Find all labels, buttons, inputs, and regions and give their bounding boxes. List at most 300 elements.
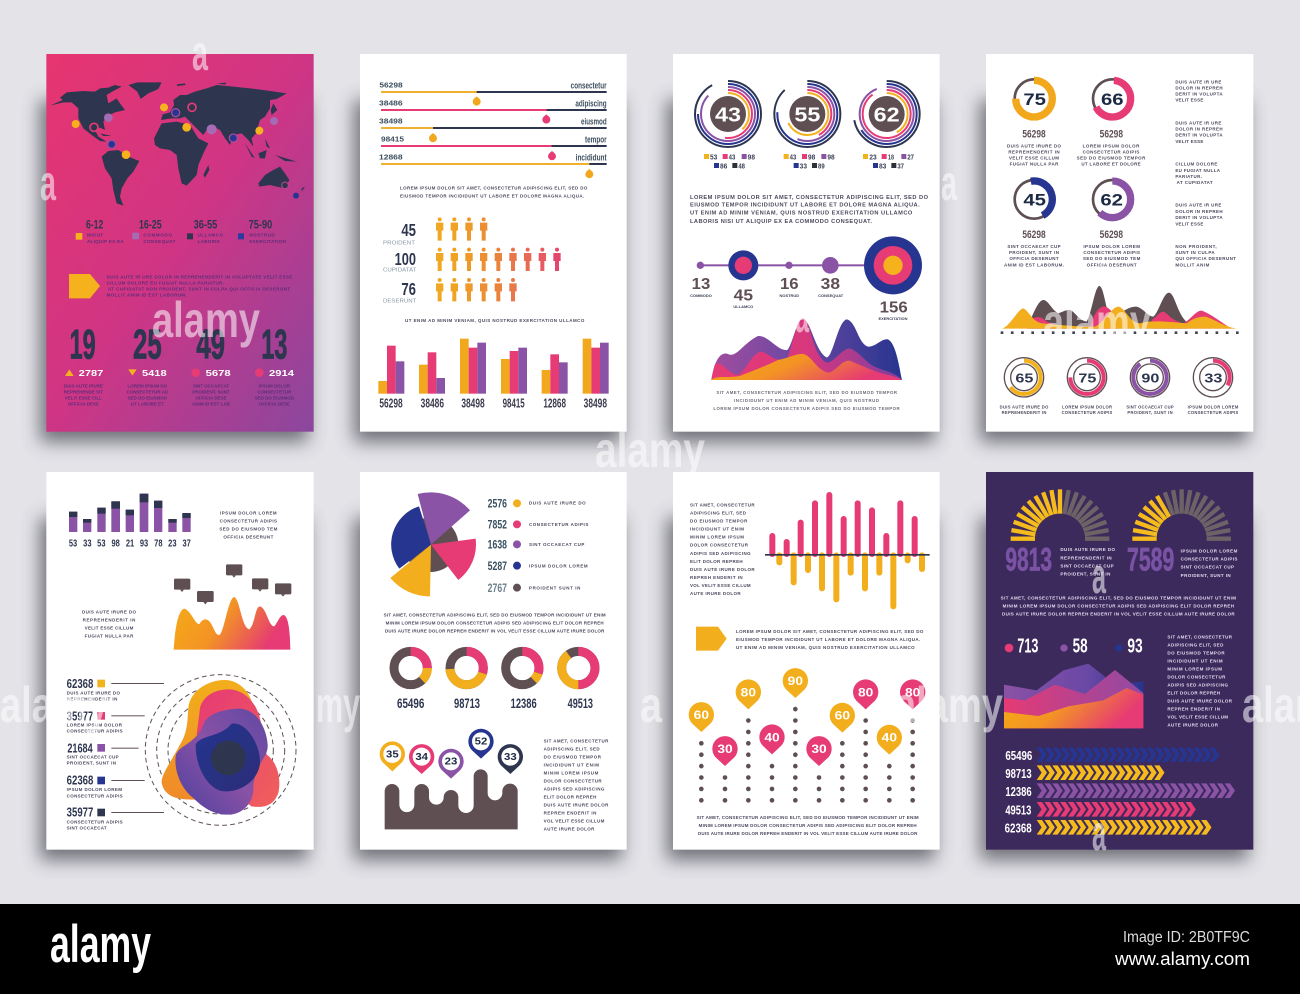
gauge labels xyxy=(1005,542,1238,578)
donut 45 xyxy=(1013,178,1055,221)
map legend: NOSTRUD xyxy=(249,232,275,237)
small gauge 90: 90 xyxy=(1141,370,1159,385)
ring legends: 43 xyxy=(790,152,796,161)
bubble timeline: 38 xyxy=(821,276,841,293)
text block: LOREM IPSUM DOLOR SIT AMET, CONSECTETUR ADIPISCING ELIT, SED DO xyxy=(736,629,924,634)
text block: VOL VELIT ESSE CILLUM xyxy=(544,818,605,823)
arrow tag xyxy=(696,627,727,651)
donut captions: ANIM ID EST LABORUM. xyxy=(1004,262,1064,267)
slider rows: 98415 xyxy=(381,134,404,143)
donut captions: IPSUM DOLOR LOREM xyxy=(1083,244,1140,249)
pictogram chart: PROIDENT xyxy=(383,240,416,246)
donut captions: OFFICIA DESERUNT xyxy=(1009,256,1059,261)
ring legends: 98 xyxy=(748,152,756,161)
bubble timeline: NOSTRUD xyxy=(779,293,799,298)
text block: MOLLIT ANIM ID EST LABORUM. xyxy=(107,292,187,297)
watermark overlay: a xyxy=(795,287,810,343)
text block xyxy=(1001,596,1236,617)
donut 66: 66 xyxy=(1101,90,1124,109)
text block: VOL VELIT ESSE CILLUM xyxy=(1167,715,1228,720)
map legend: ALIQUIP EX EA xyxy=(87,239,124,244)
gauge captions: CONSECTETUR ADIPIS xyxy=(1062,410,1113,415)
big statistics: LOREM IPSUM DO xyxy=(128,383,168,388)
slider rows: incididunt xyxy=(576,152,607,162)
bubble timeline: 13 xyxy=(692,276,710,293)
watermark overlay: alamy xyxy=(152,292,260,348)
ring legends: 33 xyxy=(800,161,807,170)
panel: radial rings, timeline and waves xyxy=(673,54,940,432)
text block: ADIPIS SED ADIPISCING xyxy=(1167,683,1228,688)
stacked bar chart: 53 xyxy=(97,538,106,549)
big statistics: 5418 xyxy=(142,368,167,378)
footer image id: Image ID: 2B0TF9C xyxy=(1123,929,1250,946)
side notes: DUIS AUTE IR URE xyxy=(1175,203,1221,208)
area stats: 93 xyxy=(1127,635,1143,657)
text block: DO EIUSMOD TEMPOR xyxy=(1167,650,1225,655)
text block: EIUSMOD TEMPOR INCIDIDUNT UT LABORE ET DOLORE MAGNA ALIQUA. xyxy=(736,637,920,642)
slider rows: eiusmod xyxy=(581,116,607,126)
side notes: DERIT IN VOLUPTA xyxy=(1175,215,1223,220)
text block: ADIPIS SED ADIPISCING xyxy=(544,786,605,791)
pie legend: IPSUM DOLOR LOREM xyxy=(529,563,588,568)
text block: CILLUM DOLORE EU FUGIAT NULLA PARIATUR. xyxy=(107,280,224,285)
panel shadows xyxy=(40,100,1248,860)
map legend xyxy=(76,217,286,244)
watermark overlay: alamy xyxy=(0,677,108,733)
donut 12386: 12386 xyxy=(511,695,537,711)
text block xyxy=(690,502,755,596)
gauge captions: CONSECTETUR ADIPIS xyxy=(1188,410,1239,415)
text block xyxy=(697,815,919,836)
map markers xyxy=(72,103,299,199)
watermark overlay: my xyxy=(316,677,360,733)
big statistics: SED DO EIUSMOD xyxy=(128,395,168,400)
slider rows: 38486 xyxy=(379,98,403,107)
value pins: 30 xyxy=(811,742,827,756)
chevron bars: 98713 xyxy=(1005,767,1032,781)
layered blob chart xyxy=(145,675,296,825)
donut 75 xyxy=(1015,79,1053,118)
donut captions: SINT OCCAECAT CUP xyxy=(1007,244,1061,249)
text block: DOLOR CONSECTETUR xyxy=(1167,675,1226,680)
text block: ADIPISCING ELIT, SED xyxy=(690,510,747,515)
pictogram chart: DESERUNT xyxy=(383,298,417,304)
text block: LOREM IPSUM DOLOR SIT AMET, CONSECTETUR ADIPISCING ELIT, SED DO xyxy=(400,185,588,190)
donut captions: 56298 xyxy=(1100,229,1123,241)
text block: AUTE IRURE DOLOR xyxy=(690,591,741,596)
gauge labels: PROIDENT, SUNT IN xyxy=(1060,571,1110,576)
text block xyxy=(1167,634,1233,728)
value pins: 30 xyxy=(717,742,733,756)
blob legend: SINT OCCAECAT xyxy=(67,825,107,830)
watermark overlay: a xyxy=(192,25,209,81)
blob legend: 21684 xyxy=(67,740,93,755)
big statistics: DUIS AUTE IRURE xyxy=(64,383,103,388)
gauge captions: DUIS AUTE IRURE DO xyxy=(1000,405,1049,410)
caption xyxy=(713,390,901,411)
big statistics: 25 xyxy=(133,320,162,367)
text block xyxy=(384,613,606,634)
caption: INCIDIDUNT UT ENIM AD MINIM VENIAM, QUIS NOSTRUD xyxy=(734,398,879,403)
side notes: MOLLIT ANIM xyxy=(1175,262,1210,267)
big statistics: OFFICIA DESE xyxy=(259,401,290,406)
text block: ADIPIS SED ADIPISCING xyxy=(690,551,751,556)
donut 45: 45 xyxy=(1023,190,1046,209)
text block: INCIDIDUNT UT ENIM xyxy=(690,527,744,532)
side notes: EU FUGIAT NULLA xyxy=(1175,168,1221,173)
text block: DO EIUSMOD TEMPOR xyxy=(544,754,602,759)
semicircle gauge 9813 xyxy=(1011,489,1109,539)
gauge labels: SINT OCCAECAT CUP xyxy=(1181,565,1234,570)
gauge labels: DUIS AUTE IRURE DO xyxy=(1060,547,1115,552)
text block xyxy=(400,185,588,198)
ring legends: 37 xyxy=(897,161,904,170)
bubble timeline: 16 xyxy=(780,276,799,293)
gauge labels: REPREHENDERIT IN xyxy=(1060,555,1112,560)
value pins: 40 xyxy=(882,731,897,745)
text block: FUGIAT NULLA PAR xyxy=(85,633,134,638)
location pins: 35 xyxy=(386,749,399,760)
donut captions xyxy=(1004,128,1146,267)
panel: diverging bars and pin dots xyxy=(673,472,940,850)
map legend: 75-90 xyxy=(249,217,273,231)
rounded column wave xyxy=(385,769,518,829)
blob legend: 62368 xyxy=(67,676,93,691)
side notes: DOLOR IN REPREH xyxy=(1175,209,1223,214)
donut 98713: 98713 xyxy=(454,695,480,711)
area stats xyxy=(1005,635,1143,657)
radial chart 43 xyxy=(695,81,761,147)
donut captions: FUGIAT NULLA PAR xyxy=(1010,162,1059,167)
text block: VELIT ESSE CILLUM xyxy=(85,625,134,630)
text block xyxy=(544,738,609,831)
panel: stacked bars, callout area and blobs xyxy=(46,472,314,850)
donut 49513: 49513 xyxy=(568,695,593,711)
text block: SIT AMET, CONSECTETUR ADIPISCING ELIT, SED DO EIUSMOD TEMPOR INCIDIDUNT UT ENIM xyxy=(384,613,606,618)
gauge labels: 9813 xyxy=(1005,542,1052,578)
stacked bar chart: 37 xyxy=(182,538,191,549)
text block: CONSECTETUR ADIPIS xyxy=(220,518,277,523)
side notes: VELIT ESSE xyxy=(1175,221,1203,226)
blob legend: SINT OCCAECAT CUP xyxy=(67,755,119,760)
text block: DOLOR CONSECTETUR xyxy=(690,543,749,548)
value pins: 80 xyxy=(858,685,874,699)
big statistics xyxy=(64,320,295,406)
footer bar xyxy=(0,904,1300,994)
value pins xyxy=(689,668,925,766)
text block: LOREM IPSUM DOLOR SIT AMET, CONSECTETUR ADIPISCING ELIT, SED DO xyxy=(690,195,929,201)
big statistics: VELIT ESSE CILL xyxy=(65,395,102,400)
area stats: 713 xyxy=(1017,635,1038,657)
pictogram chart: 45 xyxy=(401,220,416,240)
value pins: 60 xyxy=(835,709,850,723)
map legend: LABORIS xyxy=(198,239,220,244)
donut captions: REPREHENDERIT IN xyxy=(1008,149,1060,154)
pie legend: 7852 xyxy=(488,518,507,532)
pie legend: 2576 xyxy=(488,496,507,510)
text block: MINIM LOREM IPSUM xyxy=(690,535,744,540)
text block: SED DO EIUSMOD TEM xyxy=(219,526,278,531)
text block: DUIS AUTE IRURE DOLOR REPREH ENDERIT IN VOL VELIT ESSE CILLUM AUTE IRURE DOLOR xyxy=(385,629,605,634)
small gauge 75: 75 xyxy=(1078,370,1097,385)
text block: LABORIS NISI UT ALIQUIP EX EA COMMODO CONSEQUAT. xyxy=(690,219,872,225)
donut captions: VELIT ESSE CILLUM xyxy=(1009,156,1059,161)
stacked bar chart: 98 xyxy=(111,538,120,549)
polar pie chart xyxy=(390,492,476,596)
donut captions: DUIS AUTE IRURE DO xyxy=(1007,143,1061,148)
text block xyxy=(107,274,292,297)
text block: INCIDIDUNT UT ENIM xyxy=(1167,659,1223,664)
side notes: DOLOR IN REPREH xyxy=(1175,127,1223,132)
donut 49513 xyxy=(562,651,595,711)
stacked bar chart: 93 xyxy=(140,538,148,549)
pictogram chart: 100 xyxy=(395,249,416,269)
big statistics: 19 xyxy=(70,320,96,367)
text block: SIT AMET, CONSECTETUR xyxy=(1167,634,1233,639)
ring legends: 83 xyxy=(879,161,886,170)
text block: EIUSMOD TEMPOR INCIDIDUNT UT LABORE ET DOLORE MAGNA ALIQUA. xyxy=(690,203,920,209)
blob legend: REPREHENDERIT IN xyxy=(67,696,117,701)
small gauge 65 xyxy=(1004,358,1044,397)
text block: DUIS AUTE IR URE DOLOR IN REPREHENDERIT IN VOLUPTATE VELIT ESSE xyxy=(107,274,292,279)
bubble timeline: EXERCITATION xyxy=(878,316,908,321)
side notes: VELIT ESSE xyxy=(1175,139,1203,144)
bubble timeline: CONSEQUAT xyxy=(818,293,844,298)
ring legends: 53 xyxy=(710,152,717,161)
location pins: 33 xyxy=(504,752,517,763)
bar chart xyxy=(378,339,609,411)
big statistics: IPSUM DOLOR xyxy=(259,383,291,388)
text block: AUTE IRURE DOLOR xyxy=(1167,723,1219,728)
text block xyxy=(690,195,929,225)
value pins: 60 xyxy=(694,708,709,722)
blob legend: CONSECTETUR ADIPIS xyxy=(67,793,123,798)
side notes: DOLOR IN REPREH xyxy=(1175,86,1223,91)
text block: MINIM LOREM IPSUM xyxy=(1167,667,1222,672)
side notes: NON PROIDENT, xyxy=(1175,244,1217,249)
map legend: CONSEQUAT xyxy=(143,239,176,244)
slider rows: consectetur xyxy=(571,80,607,90)
big statistics: REPREHENDE SIT xyxy=(64,389,103,394)
text block: SIT AMET, CONSECTETUR xyxy=(690,502,755,507)
blob legend: DUIS AUTE IRURE DO xyxy=(67,690,120,695)
side notes: PARIATUR. xyxy=(1175,174,1202,179)
stacked bar chart xyxy=(69,494,191,549)
text block: EIUSMOD TEMPOR INCIDIDUNT UT LABORE ET DOLORE MAGNA ALIQUA. xyxy=(400,193,584,198)
text block: MINIM LOREM IPSUM DOLOR CONSECTETUR ADIPIS SED ADIPISCING ELIT DOLOR REPREH xyxy=(699,823,917,828)
text block: INCIDIDUNT UT ENIM xyxy=(544,762,599,767)
text block: REPREH ENDERIT IN xyxy=(1167,707,1220,712)
side notes: CILLUM DOLORE xyxy=(1175,162,1217,167)
layered area chart xyxy=(1004,664,1143,728)
value pins: 40 xyxy=(764,730,780,744)
chevron bars xyxy=(1005,747,1235,836)
pie legend: 2767 xyxy=(488,581,507,595)
dotted columns xyxy=(701,709,913,800)
wave area chart xyxy=(711,318,902,380)
map legend: 36-55 xyxy=(194,217,218,231)
ring legends: 18 xyxy=(888,152,895,161)
blob legend: LOREM IPSUM DOLOR xyxy=(67,723,123,728)
gauge captions: REPREHENDERIT IN xyxy=(1002,410,1046,415)
bar chart: 38498 xyxy=(461,397,485,411)
watermark overlay: a xyxy=(1092,548,1107,604)
location pins: 23 xyxy=(445,757,458,768)
slider rows: adipiscing xyxy=(575,98,607,108)
gauge captions: IPSUM DOLOR LOREM xyxy=(1188,405,1239,410)
small gauge 90 xyxy=(1130,358,1170,397)
map legend: 6-12 xyxy=(86,217,104,231)
text block: DOLOR CONSECTETUR xyxy=(544,778,602,783)
ring legends xyxy=(704,152,914,170)
world map xyxy=(50,82,305,206)
watermark overlay: alamy xyxy=(595,422,705,478)
donut captions: 56298 xyxy=(1100,128,1123,140)
gauge captions: PROIDENT, SUNT IN xyxy=(1127,410,1173,415)
pie legend: CONSECTETUR ADIPIS xyxy=(529,522,588,527)
blob legend: PROIDENT, SUNT IN xyxy=(67,761,116,766)
donut captions: UT LABORE ET DOLORE xyxy=(1081,162,1141,167)
text block: AUTE IRURE DOLOR xyxy=(544,826,595,831)
text block: ELIT DOLOR REPREH xyxy=(690,559,743,564)
pictogram chart: CUPIDATAT xyxy=(383,268,417,274)
donut 62: 62 xyxy=(1100,190,1123,209)
donut captions: CONSECTETUR ADIPIS xyxy=(1083,149,1139,154)
gauge labels: PROIDENT, SUNT IN xyxy=(1181,573,1231,578)
footer url: www.alamy.com xyxy=(1114,949,1250,969)
watermark overlay: alamy xyxy=(1043,294,1151,350)
slider rows xyxy=(379,80,607,178)
panel: donuts, ridgeline and small gauges xyxy=(986,54,1253,432)
text block xyxy=(219,510,278,539)
pie legend: DUIS AUTE IRURE DO xyxy=(529,501,586,506)
big statistics: ANIM ID EST LAB xyxy=(192,401,231,406)
donut captions: SED DO EIUSMOD TEMPOR xyxy=(1077,156,1146,161)
text block: UT ENIM AD MINIM VENIAM, QUIS NOSTRUD EXERCITATION ULLAMCO xyxy=(736,645,915,650)
donut 65496 xyxy=(394,651,427,711)
big statistics: 2787 xyxy=(79,368,104,378)
panel: sliders, people and bars xyxy=(360,54,627,432)
map legend: EXERCITATION xyxy=(249,239,286,244)
bar chart: 56298 xyxy=(379,397,403,411)
radial chart 55 xyxy=(774,81,840,147)
bubble timeline: 45 xyxy=(734,287,754,304)
side notes: QUI OFFICIA DESERUNT xyxy=(1175,256,1236,261)
pictogram chart: 76 xyxy=(401,279,416,299)
ring legends: 86 xyxy=(720,161,727,170)
text block: UT ENIM AD MINIM VENIAM, QUIS NOSTRUD EXERCITATION ULLAMCO xyxy=(690,211,913,217)
big statistics: OFFICIA DESE xyxy=(68,401,99,406)
gauge captions: LOREM IPSUM DOLOR xyxy=(1062,405,1112,410)
stacked bar chart: 23 xyxy=(168,538,177,549)
caption: UT ENIM AD MINIM VENIAM, QUIS NOSTRUD EXERCITATION ULLAMCO xyxy=(405,318,585,323)
pictogram chart xyxy=(383,217,561,304)
text block: MINIM LOREM IPSUM DOLOR CONSECTETUR ADIPIS SED ADIPISCING ELIT DOLOR REPREH xyxy=(386,621,604,626)
big statistics: PROIDENT, SUNT xyxy=(192,389,230,394)
blob legend: CONSECTETUR ADIPIS xyxy=(67,729,123,734)
footer logo: alamy xyxy=(50,915,151,974)
big statistics: 13 xyxy=(261,320,287,367)
donut 98713 xyxy=(450,651,483,711)
text block: DUIS AUTE IRURE DO xyxy=(82,609,136,614)
map legend: 16-25 xyxy=(139,217,162,231)
text block: OFFICIA DESERUNT xyxy=(223,534,274,539)
text block: DUIS AUTE IRURE DOLOR xyxy=(690,567,755,572)
big statistics: UT LABORE ET xyxy=(131,401,164,406)
text block: ELIT DOLOR REPREH xyxy=(544,794,596,799)
blob legend: 35977 xyxy=(67,708,93,723)
ring legends: 89 xyxy=(818,161,825,170)
diverging bar chart xyxy=(765,495,930,606)
text block: ADIPISCING ELIT, SED xyxy=(1167,642,1224,647)
radial chart 62 xyxy=(854,81,920,147)
text block: ADIPISCING ELIT, SED xyxy=(544,746,600,751)
text block xyxy=(736,629,924,650)
pie legend: PROIDENT SUNT IN xyxy=(529,585,580,590)
big statistics: SED DO EIUSMOD xyxy=(255,395,295,400)
map legend: COMMODO xyxy=(143,232,172,237)
gauge labels: 7589 xyxy=(1127,542,1174,578)
blob legend xyxy=(67,676,164,830)
watermark overlay: a xyxy=(1092,805,1107,861)
blob legend: CONSECTETUR ADIPIS xyxy=(67,819,123,824)
text block: REPREH ENDERIT IN xyxy=(544,810,596,815)
chevron bars: 62368 xyxy=(1005,822,1032,836)
ring legends: 43 xyxy=(729,152,735,161)
radial chart 43: 43 xyxy=(715,103,741,126)
ring legends: 48 xyxy=(738,161,746,170)
side notes: DUIS AUTE IR URE xyxy=(1175,80,1221,85)
location pins xyxy=(380,729,523,779)
text block: ELIT DOLOR REPREH xyxy=(1167,691,1220,696)
chevron bars: 65496 xyxy=(1005,749,1032,763)
donut captions: SED DO EIUSMOD TEM xyxy=(1083,256,1141,261)
text block: IPSUM DOLOR LOREM xyxy=(220,510,277,515)
gauge labels: IPSUM DOLOR LOREM xyxy=(1181,549,1238,554)
big statistics: 2914 xyxy=(269,368,294,378)
value pins: 80 xyxy=(741,685,756,699)
donut 75: 75 xyxy=(1023,90,1046,109)
stacked bar chart: 78 xyxy=(154,538,163,549)
text block: SIT AMET, CONSECTETUR xyxy=(544,738,609,743)
side notes: VELIT ESSE xyxy=(1175,98,1203,103)
bubble timeline xyxy=(690,236,922,321)
text block: REPREHENDERIT IN xyxy=(83,617,135,622)
donut 65496: 65496 xyxy=(397,695,424,711)
bubble timeline: ULLAMCO xyxy=(733,304,753,309)
bar chart: 38486 xyxy=(421,397,444,411)
pie legend: 1638 xyxy=(488,538,507,552)
big statistics: CONSECTETUR xyxy=(257,389,292,394)
radial chart 55: 55 xyxy=(794,103,820,126)
ring legends: 98 xyxy=(808,152,816,161)
small gauge 33 xyxy=(1193,358,1233,397)
donut captions: 56298 xyxy=(1022,229,1046,241)
side notes: SUNT IN CULPA xyxy=(1175,250,1215,255)
donut captions: PROIDENT, SUNT IN xyxy=(1009,250,1059,255)
chevron bars: 12386 xyxy=(1005,785,1032,799)
watermark overlay: a xyxy=(40,155,57,211)
text block: REPREH ENDERIT IN xyxy=(690,575,743,580)
side notes: DERIT IN VOLUPTA xyxy=(1175,133,1223,138)
text block: MINIM LOREM IPSUM xyxy=(544,770,599,775)
bar chart: 98415 xyxy=(503,397,525,411)
gauge labels: CONSECTETUR ADIPIS xyxy=(1181,557,1237,562)
callout area chart xyxy=(174,564,291,650)
gauge labels: SINT OCCAECAT CUP xyxy=(1060,563,1114,568)
side notes: AT CUPIDATAT xyxy=(1177,180,1213,185)
donut 62 xyxy=(1093,180,1132,219)
